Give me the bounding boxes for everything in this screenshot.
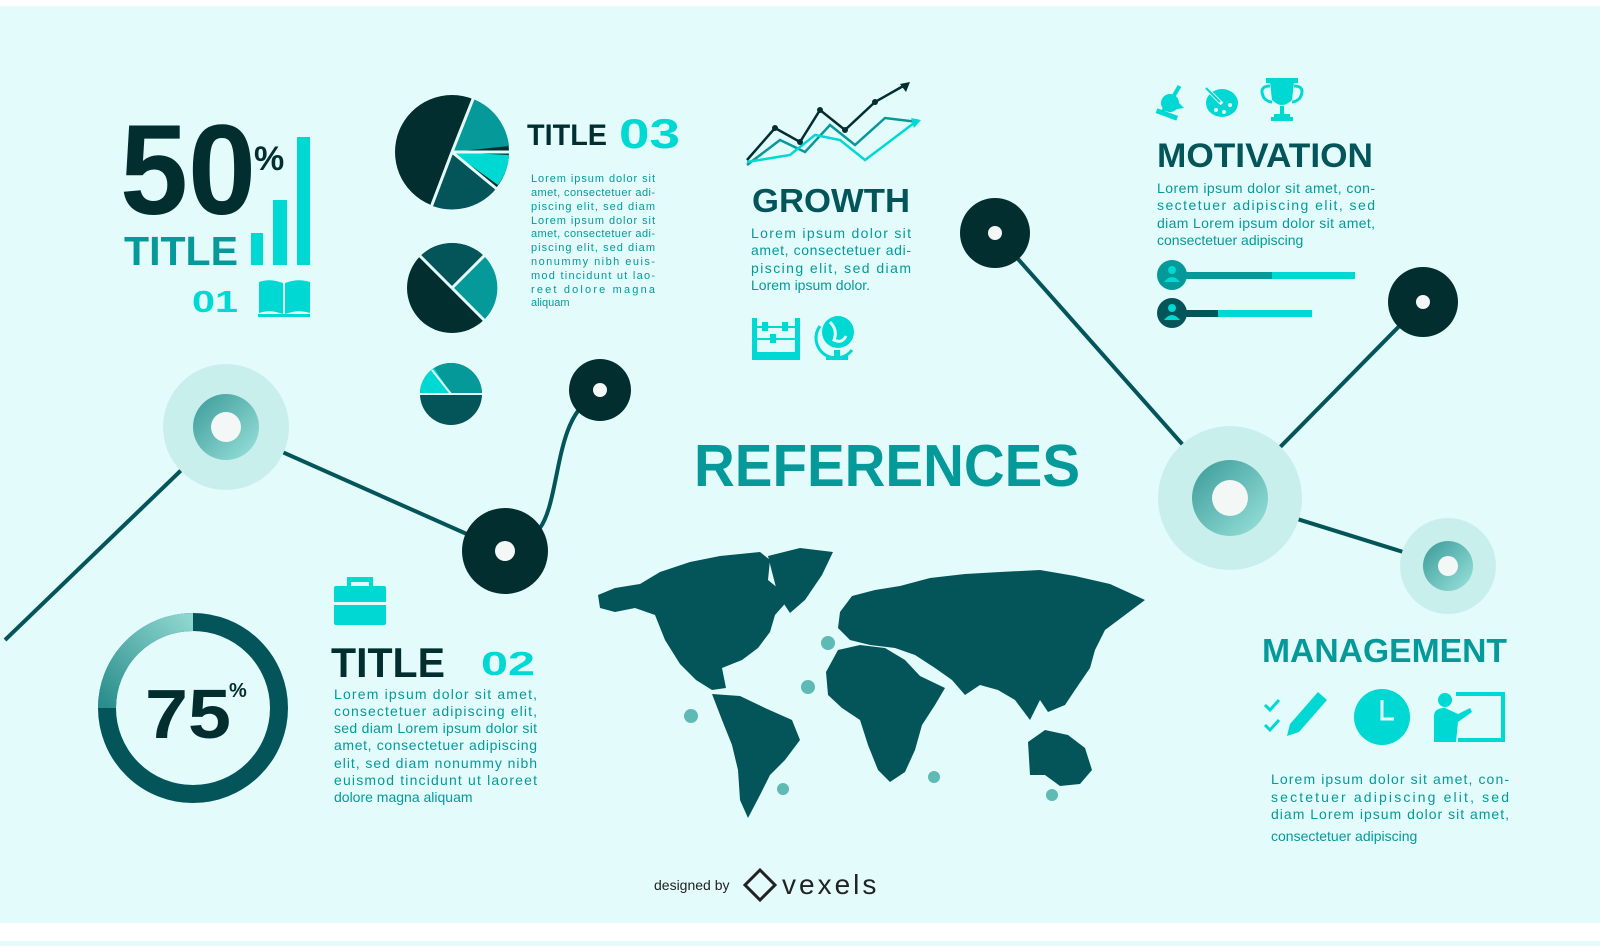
block: title 02: 02 (481, 645, 535, 682)
block: motivation: Lorem ipsum dolor sit amet, con- (1157, 180, 1375, 196)
block: title 02: consectetuer adipiscing elit, (334, 703, 537, 719)
line chart icon (747, 82, 921, 165)
block: title 02: Lorem ipsum dolor sit amet, (334, 686, 537, 702)
block: management: consectetuer adipiscing (1271, 828, 1417, 844)
block: title 03: amet, consectetuer adi- (531, 187, 655, 199)
node: right dark (1388, 267, 1458, 337)
block: growth: GROWTH (752, 182, 910, 219)
block: title 03: reet dolore magna (531, 284, 656, 296)
block: growth: amet, consectetuer adi- (751, 242, 911, 258)
block: 50% title 01: % (254, 140, 284, 178)
world map (598, 548, 1145, 818)
block: title 02 (331, 577, 542, 805)
donut 75%: % (229, 680, 247, 702)
block: management: sectetuer adipiscing elit, sed (1271, 789, 1509, 805)
icon: checklist pencil (1265, 692, 1327, 736)
block: 50% title 01: 50 (120, 99, 256, 242)
block: management: MANAGEMENT (1262, 632, 1507, 669)
block: title 02: euismod tincidunt ut laoreet (334, 772, 537, 788)
block: title 03: mod tincidunt ut lao- (531, 270, 655, 282)
block: management: diam Lorem ipsum dolor sit amet, (1271, 806, 1509, 822)
main title: REFERENCES (694, 433, 1080, 499)
node: dark top (569, 359, 631, 421)
block: 50% title 01: 01 (192, 284, 238, 319)
block: title 03: piscing elit, sed diam (531, 201, 655, 213)
block: motivation: sectetuer adipiscing elit, sed (1157, 197, 1375, 213)
block: title 03: Lorem ipsum dolor sit (531, 215, 655, 227)
block: title 03: Lorem ipsum dolor sit (531, 173, 655, 185)
footer: designed by vexels (654, 869, 879, 900)
icon: globe (816, 316, 854, 360)
block: title 03: nonummy nibh euis- (531, 256, 655, 268)
map dots (684, 636, 1058, 801)
icon: palette (1206, 88, 1238, 117)
icon: briefcase (334, 577, 386, 625)
icon: teacher (1434, 692, 1505, 742)
footer: designed by vexels: vexels (782, 869, 879, 900)
connector lines left (5, 400, 590, 640)
connector lines right (995, 233, 1448, 566)
block: growth: Lorem ipsum dolor. (751, 277, 870, 293)
block: title 03: aliquam (531, 297, 570, 309)
node: right dark top-left (960, 198, 1030, 268)
progress bar 1 (1157, 260, 1355, 290)
icon: bell (1156, 85, 1184, 121)
block: 50% title 01: TITLE (124, 228, 238, 274)
block: title 02: TITLE (331, 639, 445, 686)
block: 50% title 01 (120, 99, 310, 319)
icon: trophy (1262, 78, 1302, 121)
icon: clock (1354, 689, 1410, 745)
block: title 02: dolore magna aliquam (334, 789, 473, 805)
block: title 03 (527, 110, 680, 309)
node: right light small (1400, 518, 1496, 614)
icon: abacus (752, 318, 800, 360)
footer: designed by vexels: designed by (654, 877, 730, 893)
block: motivation (1156, 78, 1380, 328)
pie charts (395, 94, 510, 425)
donut 75% (107, 622, 279, 794)
progress bar 2 (1157, 298, 1312, 328)
block: growth (747, 82, 921, 360)
block: motivation: MOTIVATION (1157, 137, 1373, 175)
block: management (1262, 632, 1515, 844)
block: title 02: amet, consectetuer adipiscing (334, 737, 537, 753)
block: title 03: 03 (619, 110, 680, 157)
block: title 02: sed diam Lorem ipsum dolor sit (334, 720, 537, 736)
block: title 03: TITLE (527, 119, 607, 152)
block: title 02: elit, sed diam nonummy nibh (334, 755, 537, 771)
block: motivation: diam Lorem ipsum dolor sit amet, (1157, 215, 1375, 231)
block: management: Lorem ipsum dolor sit amet, con- (1271, 771, 1509, 787)
donut 75%: 75 (145, 675, 231, 753)
bar icon (251, 137, 310, 265)
block: growth: Lorem ipsum dolor sit (751, 225, 911, 241)
icon: book (258, 280, 310, 317)
block: growth: piscing elit, sed diam (751, 260, 911, 276)
node: dark middle (462, 508, 548, 594)
block: title 03: amet, consectetuer adi- (531, 228, 655, 240)
node: left light (163, 364, 289, 490)
block: title 03: piscing elit, sed diam (531, 242, 655, 254)
block: motivation: consectetuer adipiscing (1157, 232, 1303, 248)
node: right light large (1158, 426, 1302, 570)
